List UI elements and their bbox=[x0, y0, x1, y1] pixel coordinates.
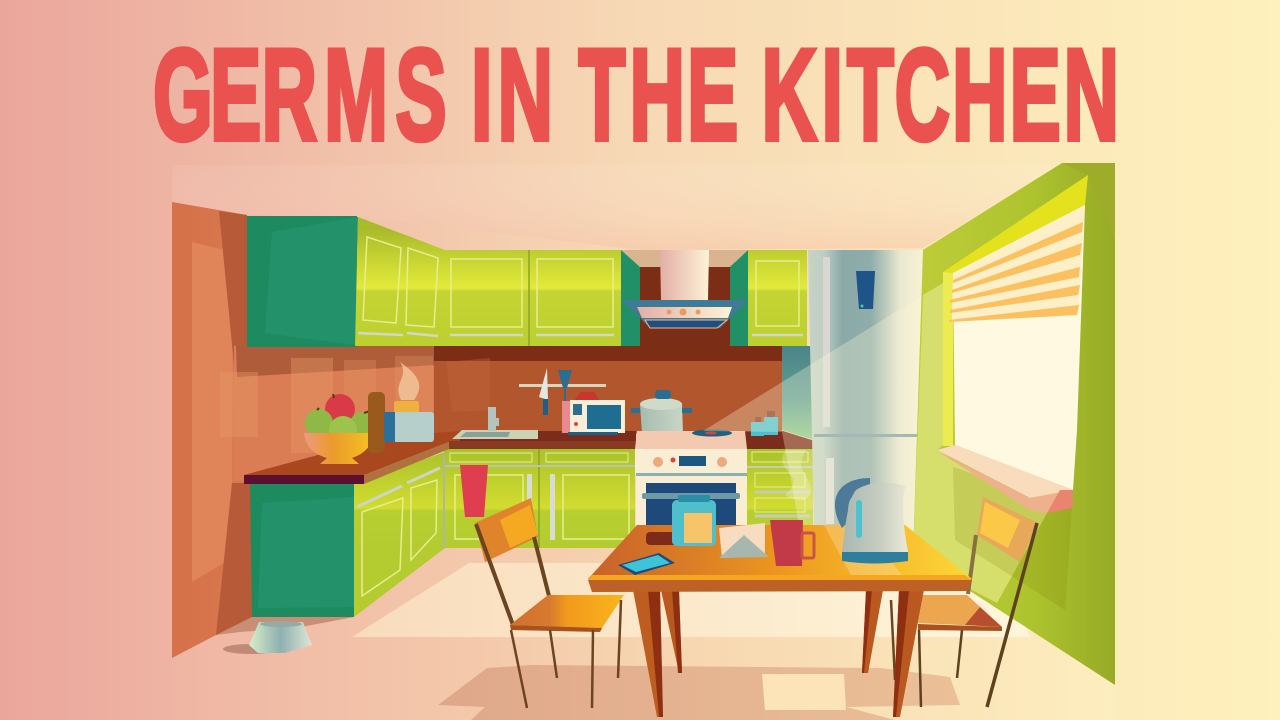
window sill bbox=[937, 445, 1073, 513]
sink and tap bbox=[452, 407, 538, 439]
table legs bbox=[633, 590, 924, 717]
upper left cabinet end bbox=[247, 216, 358, 347]
window bbox=[937, 175, 1088, 513]
knife rack bbox=[519, 368, 606, 415]
fruit bowl bbox=[304, 394, 374, 464]
cooking pot bbox=[631, 390, 692, 438]
title: GERMS IN THE KITCHEN bbox=[153, 21, 1119, 168]
left wall bbox=[172, 202, 252, 658]
red mug bbox=[770, 520, 814, 566]
chair left bbox=[475, 498, 624, 708]
teal wall beside fridge bbox=[782, 346, 814, 440]
chair right bbox=[891, 497, 1038, 707]
light beam bbox=[703, 295, 923, 530]
upper cabinets bbox=[247, 216, 807, 347]
jar bbox=[672, 495, 716, 546]
toaster and steam bbox=[384, 362, 434, 442]
window blind bbox=[949, 205, 1085, 322]
right wall bbox=[913, 163, 1115, 685]
microwave bbox=[562, 392, 625, 435]
napkin holder bbox=[719, 523, 769, 558]
worktop bbox=[244, 431, 815, 484]
kettle bbox=[835, 478, 908, 564]
table top bbox=[588, 525, 972, 579]
back wall, left section bbox=[220, 346, 435, 482]
fridge bbox=[808, 250, 923, 530]
phone bbox=[618, 553, 675, 575]
floor bbox=[172, 548, 1116, 720]
left base cabinet end bbox=[250, 484, 354, 617]
dish on table bbox=[646, 532, 680, 545]
right base cabinet bbox=[747, 447, 813, 525]
dog bowl bbox=[223, 621, 312, 654]
steam from mug bbox=[782, 450, 811, 500]
back wall, splashback bbox=[434, 250, 782, 434]
table bbox=[588, 525, 972, 717]
upper corner cabinet doors bbox=[355, 217, 445, 346]
corner base cabinets side bbox=[354, 452, 445, 617]
upper right cabinet bbox=[748, 250, 807, 346]
ceiling bbox=[172, 163, 1062, 250]
base cabinets bbox=[250, 447, 813, 617]
kitchen illustration bbox=[172, 163, 1116, 720]
tea towel bbox=[460, 465, 488, 517]
cooker bbox=[635, 430, 747, 525]
upper back cabinet doors bbox=[445, 250, 621, 346]
back base cabinets bbox=[444, 448, 635, 548]
pepper mill bbox=[368, 392, 385, 453]
spice jars bbox=[751, 411, 778, 436]
teal cabinet side panels bbox=[621, 250, 640, 346]
extractor hood bbox=[622, 250, 748, 328]
